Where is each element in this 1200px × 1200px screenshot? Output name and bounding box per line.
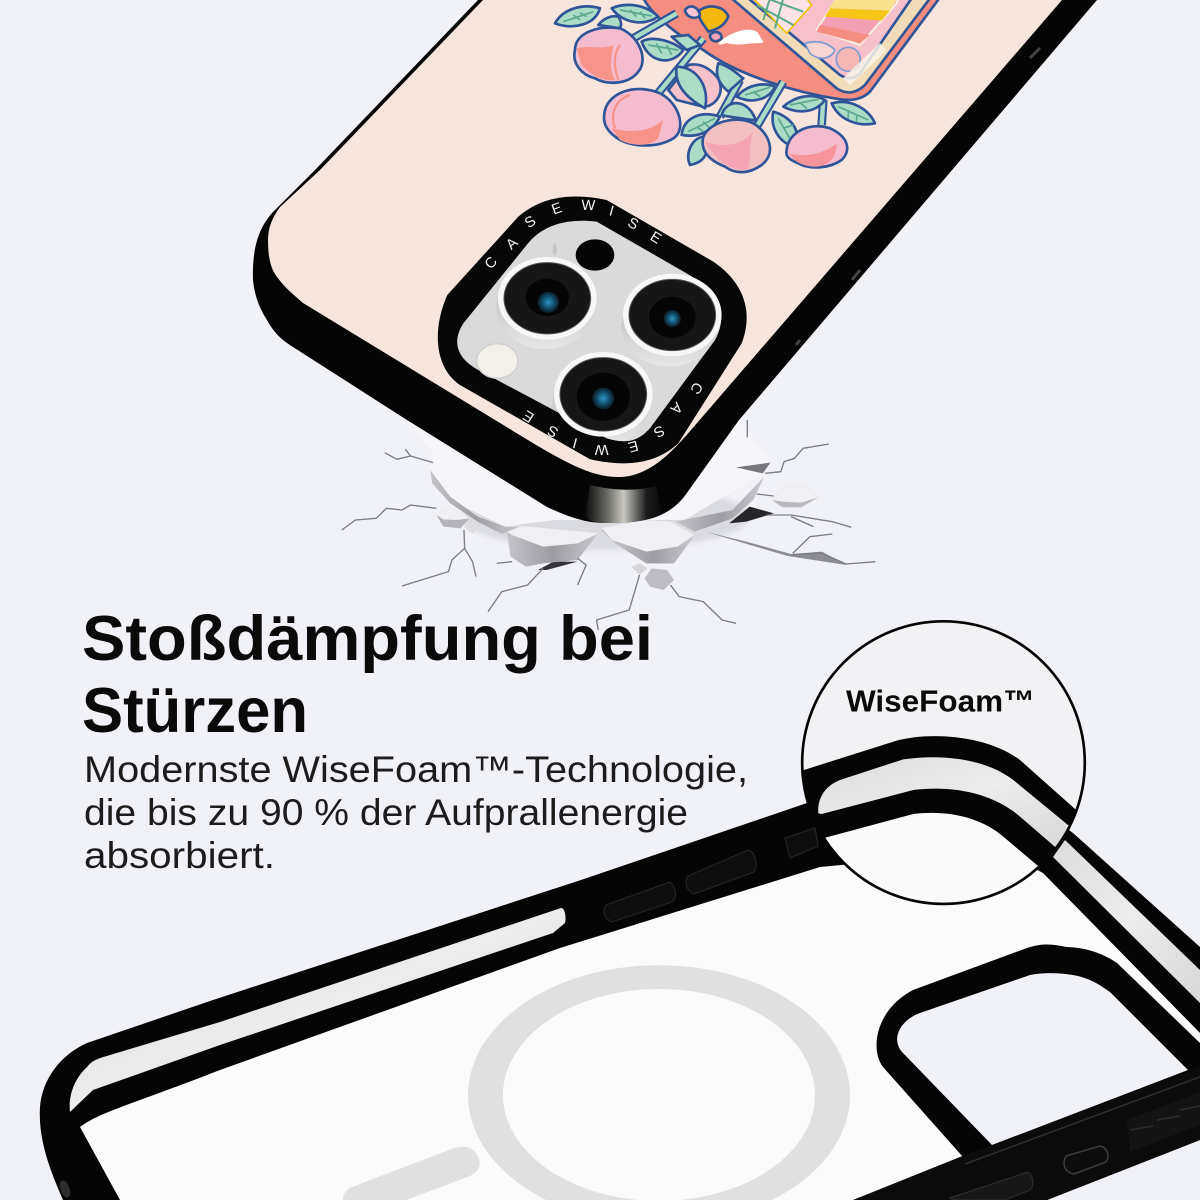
magnified case corner	[804, 736, 1076, 866]
CASEWISE ring text: E	[626, 437, 640, 455]
WiseFoam label: WiseFoam™	[846, 685, 1035, 718]
magnifier ring	[802, 621, 1085, 904]
CASEWISE ring text: S	[625, 215, 641, 234]
transparent back panel	[80, 850, 1200, 1200]
lens two	[623, 274, 722, 356]
body text: absorbiert.	[84, 835, 275, 876]
camera cut-out opening	[897, 973, 1188, 1145]
CASEWISE ring text: I	[571, 434, 579, 451]
right foam slot	[1053, 840, 1200, 1003]
camera module	[438, 196, 747, 463]
lens three	[554, 352, 653, 437]
yellow character and glove	[685, 6, 762, 43]
bottom frame edge	[853, 1067, 1200, 1200]
flash	[477, 344, 518, 378]
CASEWISE ring text: A	[667, 398, 685, 417]
body text: Modernste WiseFoam™-Technologie,	[84, 749, 748, 790]
CASEWISE ring text: S	[545, 421, 561, 440]
CASEWISE ring text: S	[522, 213, 539, 232]
MagSafe ring	[468, 965, 850, 1200]
bottom side button	[950, 1172, 1033, 1200]
MagSafe alignment bar	[343, 1147, 480, 1200]
CASEWISE ring text: E	[520, 406, 537, 425]
CASEWISE ring text: S	[650, 421, 667, 440]
stems	[633, 13, 823, 127]
CASEWISE ring text: C	[482, 254, 501, 273]
heading	[82, 604, 653, 746]
peach back panel	[268, 0, 1062, 477]
CASEWISE ring text: E	[647, 229, 664, 248]
hidden flower	[668, 64, 721, 107]
left foam slot	[70, 908, 566, 1112]
case black frame	[40, 770, 1200, 1200]
CASEWISE ring text: W	[581, 198, 596, 214]
top phone with case	[253, 0, 1097, 523]
camera ring	[438, 196, 747, 463]
mute switch	[1064, 1146, 1108, 1174]
lens one	[498, 257, 597, 340]
soft ground shadow	[461, 483, 750, 550]
side buttons hint	[796, 48, 1040, 345]
lens barrels	[496, 298, 718, 442]
bumper glare	[585, 485, 662, 523]
pink illustrated device	[643, 0, 939, 100]
CASEWISE ring text: I	[607, 203, 615, 220]
leaf veins	[563, 10, 868, 142]
body text: die bis zu 90 % der Aufprallenergie	[84, 792, 688, 833]
cracked ground impact	[342, 420, 875, 630]
small debris	[436, 485, 818, 590]
camera plate	[457, 221, 721, 441]
CASEWISE ring text: C	[686, 379, 705, 397]
volume buttons	[604, 828, 818, 922]
heading: Stürzen	[82, 676, 308, 746]
magnifier background	[802, 621, 1085, 904]
microphone dot	[553, 243, 557, 255]
flower three	[703, 120, 770, 172]
body text	[84, 749, 748, 876]
CASEWISE ring text: W	[595, 441, 609, 457]
lidar sensor	[576, 239, 614, 271]
raised ground plates	[405, 420, 769, 527]
plate broken edges	[430, 463, 846, 570]
illustration: flowers and pink phone	[555, 0, 939, 172]
bottom frame highlight	[965, 1077, 1200, 1164]
empty case (bottom)	[40, 770, 1200, 1200]
rock chunk centre	[602, 520, 695, 563]
hairline cracks	[342, 420, 875, 630]
CASEWISE ring text: E	[550, 200, 565, 218]
magnifier callout: WiseFoam	[793, 621, 1085, 910]
leaves	[555, 5, 875, 165]
flower one	[574, 28, 643, 83]
case black bumper	[253, 0, 1097, 523]
camera cut-out frame	[877, 944, 1200, 1157]
charging hole	[58, 1179, 72, 1199]
heading: Stoßdämpfung bei	[82, 604, 653, 674]
bottom frame sheen	[1127, 1092, 1200, 1152]
CASEWISE ring text: A	[503, 235, 521, 253]
rock chunk left	[507, 526, 598, 567]
CASEWISE ring text	[482, 198, 705, 457]
flower two	[604, 89, 680, 145]
flower four	[786, 126, 847, 167]
